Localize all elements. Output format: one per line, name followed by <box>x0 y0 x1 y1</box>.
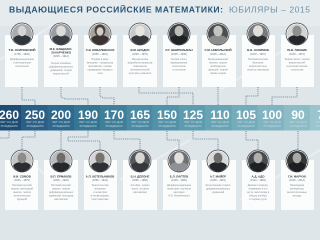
panel: Ado: названную в его <box>249 188 268 190</box>
panel: Bradis <box>123 23 157 87</box>
panel: Shnirelman: и топология <box>172 68 187 72</box>
panel: Marchuk: вычислительные <box>287 191 307 194</box>
title <box>9 4 310 14</box>
panel: Nikolsky: С.М. НИКОЛЬСКИЙ <box>204 48 232 52</box>
anniversary labels: ЛЕТ СО ДНЯ <box>0 120 18 124</box>
panel: Nikolsky: Функциональный <box>208 58 229 61</box>
anniversary labels: 190 <box>78 108 98 122</box>
panel: Osipovsky: исчисления <box>15 65 29 68</box>
panel: Somov: Математический <box>12 184 32 187</box>
anniversary labels: РОЖДЕНИЯ <box>159 124 175 128</box>
panel: Laptev: Н.И. Лобачевского <box>168 194 190 198</box>
anniversary labels: РОЖДЕНИЯ <box>27 124 43 128</box>
panel: Ermakov: анализ, теория <box>52 188 70 190</box>
panel: Delone: чисел, история <box>131 188 149 190</box>
panel: Kovalevskaya: математики, первая <box>88 65 112 68</box>
anniversary labels: ЛЕТ СО ДНЯ <box>289 120 307 124</box>
anniversary band <box>0 105 320 130</box>
panel: Osipovsky <box>5 23 38 87</box>
anniversary labels <box>0 108 320 128</box>
panel: Osipovsky: Т.Ф. ОСИПОВСКИЙ <box>8 48 36 52</box>
anniversary labels: РОЖДЕНИЯ <box>185 124 201 128</box>
panel: Ado: Доказал теорему, <box>248 184 269 187</box>
panel: Vashchenko-Zakharchenko: дифференциальных <box>49 66 74 68</box>
panel: Ermakov: уравнений, методика <box>49 194 74 198</box>
panel: Delone: математики <box>133 191 147 194</box>
panel: Mayer <box>202 150 236 210</box>
panel: Kovalevskaya <box>84 23 117 87</box>
panel: Bradis: математической <box>130 68 150 72</box>
panel: Marchuk: Прикладная <box>290 184 305 187</box>
panel: Marchuk: математика, <box>290 188 304 190</box>
panel: Vashchenko-Zakharchenko: вероятностей <box>53 72 70 76</box>
panel: Somov: функций <box>17 198 28 201</box>
anniversary labels: ЛЕТ СО ДНЯ <box>237 120 255 124</box>
panel: Delone: Алгебра, теория <box>130 184 150 187</box>
panel: Nalimov: биология, <box>252 62 264 64</box>
panel: Linnik: и математическая <box>286 65 308 68</box>
panel: Nikolsky: анализ, теория <box>209 62 227 64</box>
panel: Kotelnikov: и геометрия <box>93 191 108 194</box>
title: ЮБИЛЯРЫ – 2015 <box>229 4 310 14</box>
panel: Somov: анализ, теория <box>13 191 31 194</box>
panel: Laptev: Б.Л. ЛАПТЕВ <box>170 174 188 178</box>
panel: Bradis: повышения <box>133 65 147 68</box>
panel: Kovalevskaya: (1850 – 1891) <box>92 53 108 56</box>
panel: Linnik: (1915 – 1972) <box>289 53 305 56</box>
panel: Nalimov: В.В. НАЛИМОВ <box>247 48 269 52</box>
panel: Nikolsky: (1905 – 2012) <box>210 53 226 56</box>
anniversary labels: РОЖДЕНИЯ <box>80 124 96 128</box>
anniversary labels: ЛЕТ СО ДНЯ <box>131 120 149 124</box>
panel: Ado: и теорию групп <box>249 198 267 201</box>
panel: Ado: честь, внёс вклад в <box>247 191 270 194</box>
anniversary labels: 100 <box>262 108 282 122</box>
panel: Kotelnikov <box>84 150 117 210</box>
panel: Kovalevskaya: тела <box>97 72 103 75</box>
panel: Nalimov: Математическая <box>248 58 268 61</box>
panel: Marchuk: Г.И. МАРЧУК <box>288 174 306 178</box>
panel: Somov: анализ, векторный <box>11 188 34 190</box>
panel: Mayer: Качественная теория <box>206 184 231 187</box>
panel: Delone: Б.Н. ДЕЛОНЕ <box>131 174 149 178</box>
panel: Vashchenko-Zakharchenko: ЗАХАРЧЕНКО <box>51 50 72 54</box>
anniversary labels: РОЖДЕНИЯ <box>212 124 228 128</box>
panel: Linnik: вероятностей <box>289 62 306 64</box>
panel: Nalimov: вероятностные <box>249 65 267 68</box>
anniversary labels: РОЖДЕНИЯ <box>238 124 254 128</box>
panel: Vashchenko-Zakharchenko: уравнений, теория <box>50 69 72 72</box>
panel: Kotelnikov: А.П. КОТЕЛЬНИКОВ <box>86 174 114 178</box>
anniversary labels: РОЖДЕНИЯ <box>106 124 122 128</box>
panel: Kotelnikov: в неевклидовых <box>91 194 110 198</box>
anniversary labels: РОЖДЕНИЯ <box>53 124 69 128</box>
anniversary labels: ЛЕТ СО ДНЯ <box>211 120 229 124</box>
panel: Kovalevskaya: С.В. КОВАЛЕВСКАЯ <box>86 48 114 52</box>
panel: Somov: эллиптических <box>13 194 31 198</box>
panel: Bradis: В.М. БРАДИС <box>130 48 150 52</box>
anniversary labels: 150 <box>157 108 177 122</box>
panel: Shnirelman: вариационное <box>171 62 188 64</box>
anniversary labels: ЛЕТ СО ДНЯ <box>105 120 123 124</box>
panel: Bradis: культуры учащихся <box>129 72 152 75</box>
panel: Osipovsky: (1765 – 1832) <box>14 53 30 56</box>
panel: Laptev: наследия <box>173 191 185 194</box>
panel: Ermakov: дифференциальных <box>49 191 74 194</box>
panel: Marchuk: методы <box>293 194 302 198</box>
panel: Nalimov: аспекты эволюции <box>247 68 269 72</box>
panel: Laptev <box>163 150 197 210</box>
panel: Delone <box>123 150 157 210</box>
panel: Nikolsky <box>202 23 236 87</box>
anniversary labels: 90 <box>291 108 305 122</box>
panel: Shnirelman: Л.Г. ШНИРЕЛЬМАН <box>165 48 193 52</box>
anniversary labels: 200 <box>51 108 71 122</box>
panel: Ermakov: В.П. ЕРМАКОВ <box>50 174 72 178</box>
panel: Ermakov: математики <box>54 198 68 201</box>
panel: Bradis: Методические <box>132 58 149 61</box>
panel: Vashchenko-Zakharchenko <box>44 23 78 87</box>
title: ВЫДАЮЩИЕСЯ РОССИЙСКИЕ МАТЕМАТИКИ: <box>9 4 223 14</box>
panel: Vashchenko-Zakharchenko: Теория линейных <box>51 62 72 65</box>
panel: Mayer: дифференциальных <box>206 188 231 190</box>
panel: Shnirelman: (1905 – 1938) <box>171 53 187 56</box>
panel: Marchuk <box>281 150 314 210</box>
connectors <box>0 87 298 150</box>
anniversary labels: ЛЕТ СО ДНЯ <box>158 120 176 124</box>
anniversary labels: 105 <box>236 108 256 122</box>
panel: Shnirelman <box>163 23 197 87</box>
panel: Somov <box>5 150 38 210</box>
panel: Kotelnikov: пространствах <box>91 198 109 201</box>
panel: Laptev: (1905 – 1989) <box>171 179 187 182</box>
panel: Ermakov: Математический <box>51 184 71 187</box>
panel: Ado: (1910 – 1983) <box>250 179 266 182</box>
anniversary labels: ЛЕТ СО ДНЯ <box>52 120 70 124</box>
panel: Kotelnikov: (1865 – 1944) <box>92 179 108 182</box>
panel: Ado: А.Д. АДО <box>251 174 265 178</box>
panel: Kotelnikov: механика <box>95 188 106 190</box>
panel: Bradis: (1890 – 1975) <box>132 53 148 56</box>
anniversary labels: РОЖДЕНИЯ <box>264 124 280 128</box>
panel: Mayer: А.Г. МАЙЕР <box>210 174 226 178</box>
anniversary labels: ЛЕТ СО ДНЯ <box>263 120 281 124</box>
anniversary labels: РОЖДЕНИЯ <box>132 124 148 128</box>
anniversary labels: 170 <box>104 108 124 122</box>
panel: Bradis: разработки вопросов <box>128 62 153 64</box>
panel: Shnirelman: исчисление <box>172 65 186 68</box>
panel: Osipovsky: и интегральное <box>13 62 32 64</box>
panel: Ado: общую алгебру <box>249 194 268 198</box>
panel: Linnik: статистика <box>291 68 304 72</box>
panel: Ermakov <box>44 150 78 210</box>
anniversary labels: РОЖДЕНИЯ <box>1 124 17 128</box>
panel: Vashchenko-Zakharchenko: М.Е. ВАЩЕНКО- <box>50 47 72 51</box>
panel: Kovalevskaya: женщина – профессор <box>87 62 114 64</box>
panel: Laptev: Дифференциальная <box>167 184 192 187</box>
panel: Somov: И.И. СОМОВ <box>13 174 31 178</box>
panel: Somov: (1815 – 1876) <box>14 179 30 182</box>
panel: Ado <box>242 150 275 210</box>
anniversary labels: ЛЕТ СО ДНЯ <box>184 120 202 124</box>
panel: Linnik <box>281 23 314 87</box>
panel: Mayer: (1905 – 1951) <box>210 179 226 182</box>
panel: Mayer: уравнений <box>212 191 225 194</box>
panel: Ermakov: (1845 – 1922) <box>53 179 69 182</box>
panel: Linnik: Теория чисел, теория <box>284 58 310 61</box>
panel: Kovalevskaya: придворная твердого <box>88 68 113 72</box>
anniversary labels: 125 <box>183 108 203 122</box>
anniversary labels: ЛЕТ СО ДНЯ <box>26 120 44 124</box>
anniversary labels: 165 <box>130 108 150 122</box>
panel: Kotelnikov: Теоретическая <box>91 184 109 187</box>
anniversary labels: 250 <box>25 108 45 122</box>
panel: Nikolsky: приближения <box>210 65 226 68</box>
panel: Delone: (1890 – 1980) <box>132 179 148 182</box>
panel: Nikolsky: кривых кодов <box>210 72 226 75</box>
panel: Vashchenko-Zakharchenko: (1825 – 1912) <box>53 55 69 58</box>
panel: Linnik: Ю.В. ЛИННИК <box>287 48 307 52</box>
panel: Marchuk: (1925 – 2013) <box>289 179 305 182</box>
panel: Shnirelman: Теория чисел, <box>171 58 188 61</box>
panel: Nikolsky: функций, теория <box>208 68 228 72</box>
panel: Osipovsky: Дифференциальное <box>10 58 35 61</box>
panel: Kovalevskaya: Первая в мире <box>91 58 109 61</box>
panel: Nalimov: (1910 – 1997) <box>250 53 266 56</box>
anniversary labels: РОЖДЕНИЯ <box>290 124 306 128</box>
anniversary labels: 110 <box>210 108 230 122</box>
anniversary labels: ЛЕТ СО ДНЯ <box>79 120 97 124</box>
panel: Laptev: геометрия, изучение <box>167 188 192 190</box>
panel: Nalimov <box>242 23 275 87</box>
